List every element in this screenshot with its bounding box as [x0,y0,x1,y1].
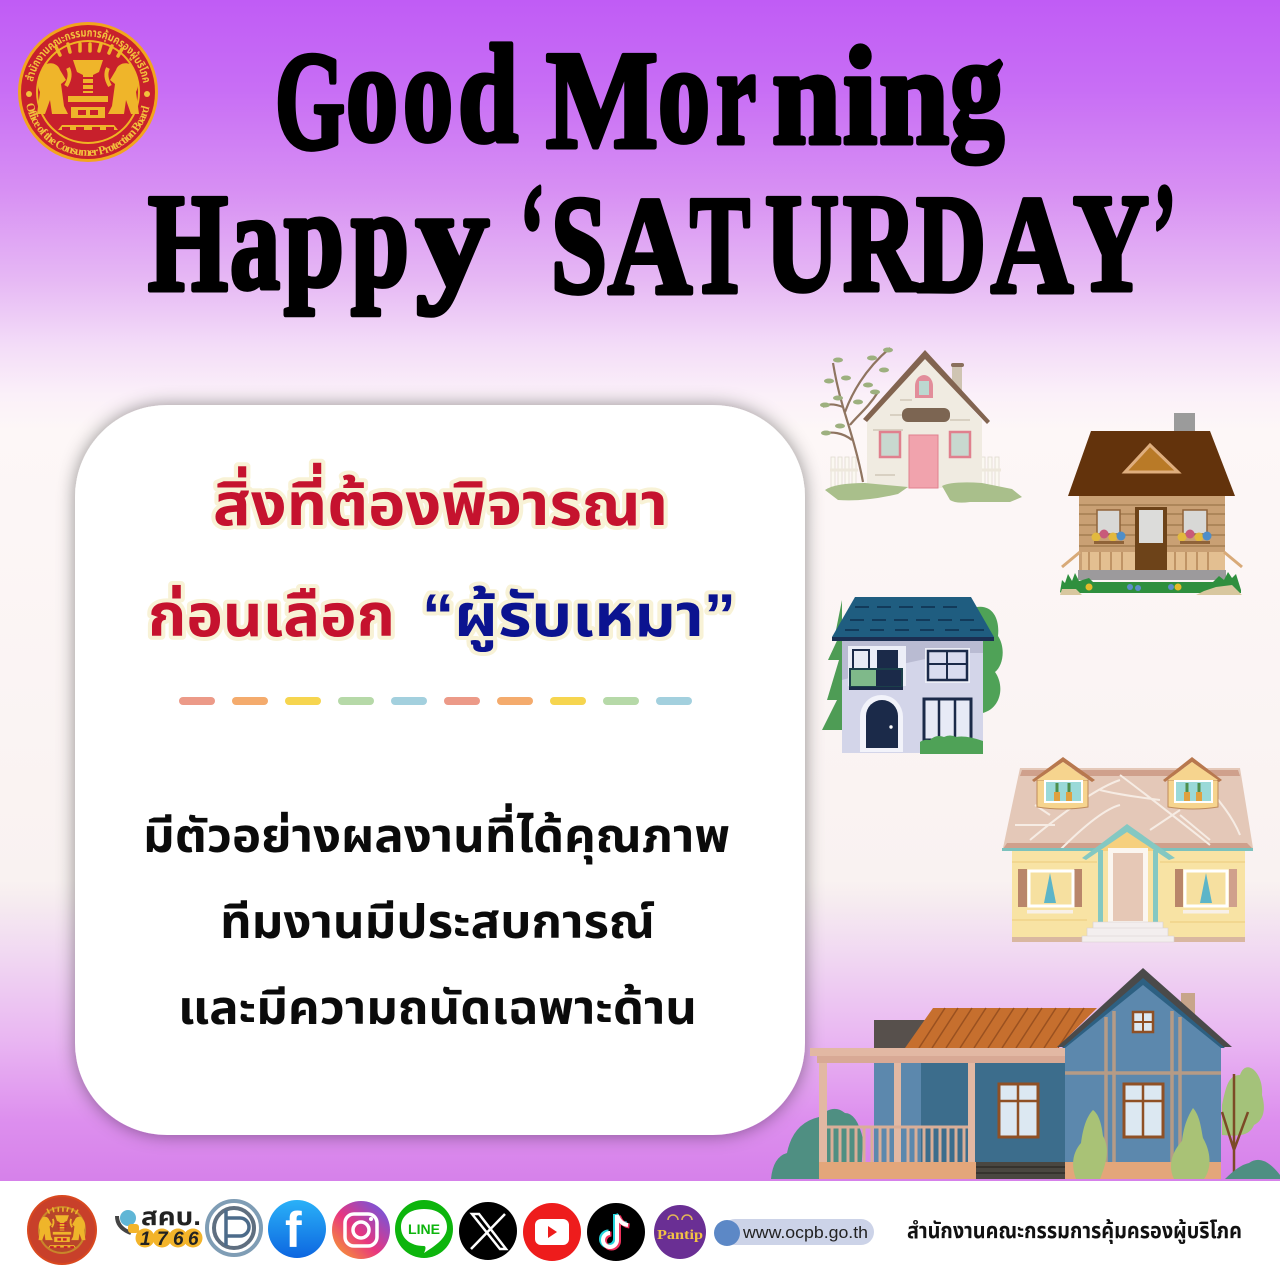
title: Good Morning: i [843,19,877,174]
title: Happy SATURDAY: A [991,168,1073,323]
text block: body lines [143,803,730,1034]
title: Good Morning: d [458,17,518,172]
title: Happy SATURDAY: p [351,161,409,316]
text block: body lines: มีตัวอย่างผลงานที่ได้คุณภาพ [143,803,730,864]
icon: hotline 1766: 1 [140,1229,151,1250]
icon: YouTube [523,1203,581,1261]
heading: before choosing contractor: “ผู้รับเหมา” [422,582,736,652]
icon: hotline 1766: 6 [188,1229,199,1250]
title: Good Morning: r [716,19,756,174]
illustration: blue two-storey house [822,597,1003,754]
icon: Pantip: Pantip [657,1228,703,1243]
icon: hotline 1766: สคบ. [141,1203,201,1231]
logo: Office of the Consumer Protection Board seal [18,22,158,162]
heading: before choosing contractor [148,582,736,652]
title: Happy SATURDAY: p [284,161,344,316]
title: Happy SATURDAY: H [148,166,228,321]
title: Good Morning: o [658,17,710,172]
illustration: brown log cabin [1060,413,1242,595]
title: Happy SATURDAY: Y [1073,166,1149,321]
logo: Office of the Consumer Protection Board seal: สำนักงานคณะกรรมการคุ้มครองผู้บริโภค [25,30,149,83]
icon: hotline 1766: 7 [157,1229,169,1250]
title: Good Morning: n [772,19,841,174]
title: Happy SATURDAY: A [608,169,692,324]
title: Good Morning: o [346,16,398,171]
illustration: blue ranch house [771,968,1280,1179]
title: Good Morning: n [879,19,949,174]
title: Happy SATURDAY: S [551,168,607,323]
illustration: white cottage with tree [820,348,1022,503]
icon: OCPB circle [207,1201,261,1255]
icon: LINE: LINE [408,1221,440,1237]
icon: X [459,1202,517,1260]
icon: LINE [395,1200,453,1258]
icon: hotline 1766: 6 [173,1229,184,1250]
text block: body lines: ทีมงานมีประสบการณ์ [220,895,655,948]
icon: facebook [268,1200,326,1258]
logo: Office of the Consumer Protection Board seal: Office of the Consumer Protection Board [26,103,150,156]
website pill [714,1219,874,1246]
title: Happy SATURDAY: D [916,167,986,322]
illustration: yellow watercolor house [1002,757,1253,942]
footer: white strip [0,1181,1280,1280]
title: Good Morning: o [403,16,453,171]
text: ’ [1153,156,1176,311]
icon: TikTok [587,1203,645,1261]
title: Good Morning: M [546,23,658,178]
website pill: www.ocpb.go.th [742,1224,868,1242]
organisation name: สำนักงานคณะกรรมการคุ้มครองผู้บริโภค [907,1218,1242,1244]
divider: coloured dashes [179,697,692,705]
icon: Pantip [654,1205,706,1259]
title: Happy SATURDAY: R [843,166,918,321]
icon: facebook: f [285,1202,302,1258]
title: Good Morning: G [275,24,345,179]
title: Happy SATURDAY: y [416,161,489,316]
icon: hotline 1766 [117,1203,202,1250]
title: Happy SATURDAY: ‘ [520,156,544,311]
icon: instagram [332,1201,390,1259]
title: Happy SATURDAY: U [765,166,839,321]
logo: seal small [27,1195,97,1265]
text block: body lines: และมีความถนัดเฉพาะด้าน [178,981,697,1034]
heading: before choosing contractor: ก่อนเลือก [148,582,395,649]
panel: white card [75,405,805,1135]
title: Happy SATURDAY: a [230,164,280,319]
title: Good Morning: g [950,9,1004,164]
heading: things to consider: สิ่งที่ต้องพิจารณา [213,462,668,538]
title: Happy SATURDAY: T [690,168,750,323]
